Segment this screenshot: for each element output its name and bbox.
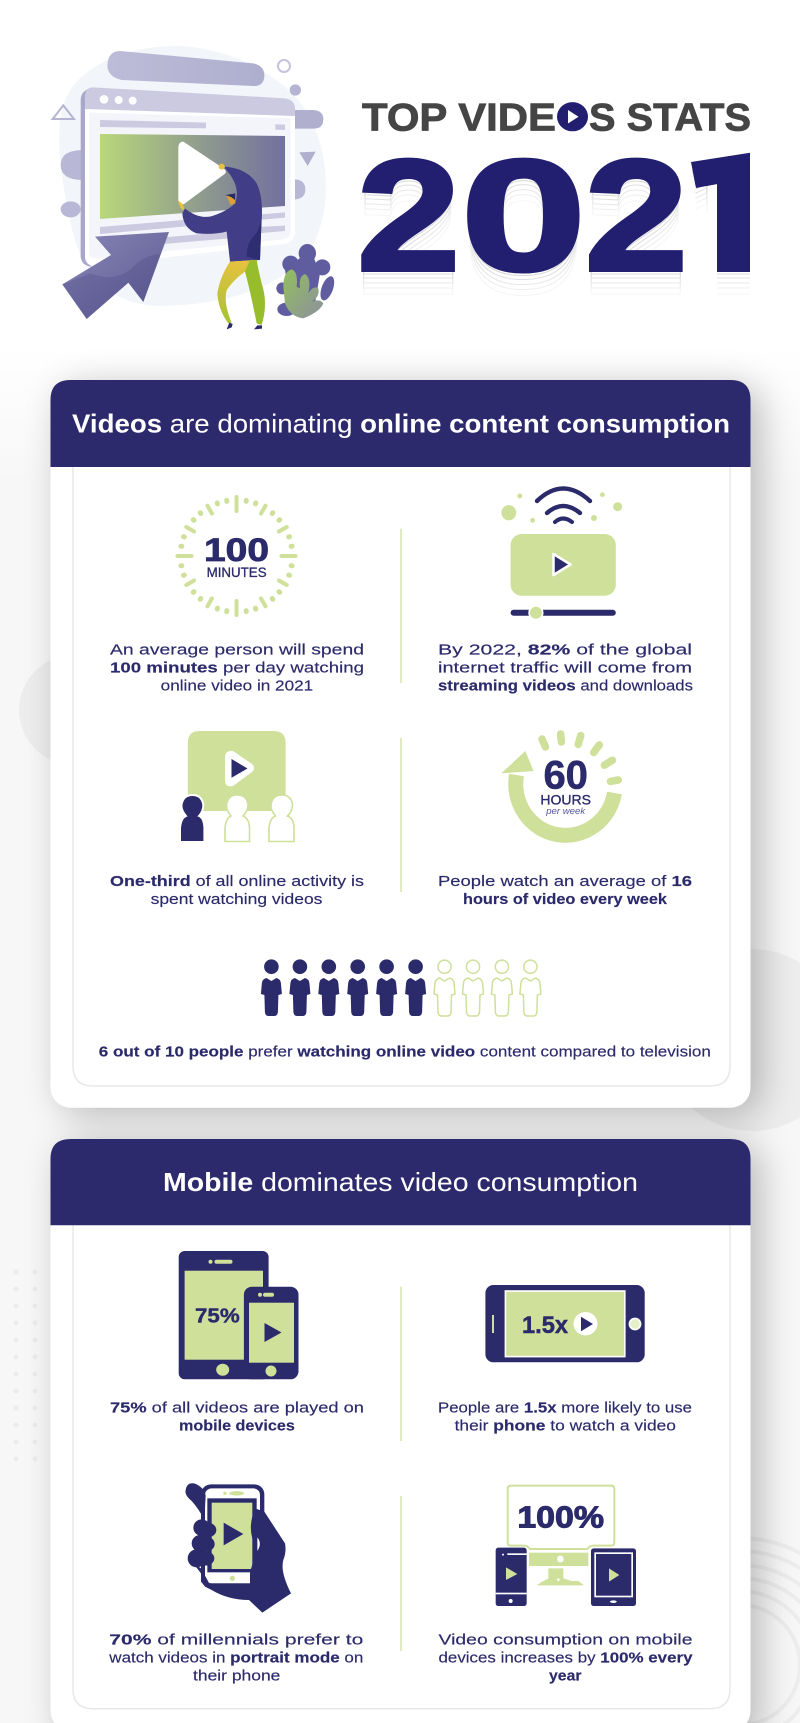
- text: one third: [110, 874, 364, 908]
- text: 82 percent streaming: [438, 642, 693, 694]
- text: 100 minutes: 100 minutes per day watching: [110, 660, 364, 676]
- big year with stacked echo lines: 0: [461, 141, 586, 317]
- icon: streaming video with wifi: [501, 488, 622, 620]
- text: 70 percent millennials: their phone: [193, 1668, 280, 1684]
- text: 1.5x: their phone to watch a video: [455, 1419, 676, 1435]
- text: 100 minutes: [110, 642, 364, 694]
- pictogram: 6 out of 10 people: [261, 959, 541, 1016]
- big year with stacked echo lines: [361, 152, 750, 296]
- big year with stacked echo lines: 0: [461, 136, 586, 312]
- icon: 100 minutes clock: [178, 497, 296, 615]
- big year with stacked echo lines: 0: [461, 152, 586, 328]
- text: 1.5x: [438, 1401, 692, 1435]
- big year with stacked echo lines: 2: [585, 128, 688, 304]
- big year with stacked echo lines: 2: [585, 132, 688, 308]
- icon: 60 hours per week: per week: [545, 806, 586, 817]
- panel: mobile dominates video consumption: [50, 1139, 750, 1723]
- title: top videos stats 2021: [361, 102, 750, 296]
- big year with stacked echo lines: 2: [357, 136, 460, 312]
- icon: 60 hours per week: [501, 734, 618, 835]
- big year with stacked echo lines: 2: [585, 141, 688, 317]
- text: 100 percent every year: year: [549, 1668, 582, 1684]
- big year with stacked echo lines: 2: [357, 146, 460, 322]
- text: 82 percent streaming: By 2022, 82% of the global: [438, 642, 692, 658]
- text: one third: One-third of all online activity is: [110, 874, 364, 890]
- big year with stacked echo lines: 0: [461, 128, 586, 304]
- big year with stacked echo lines: 0: [461, 146, 586, 322]
- big year with stacked echo lines: 2: [357, 141, 460, 317]
- heading: top videos stats: [362, 96, 751, 140]
- text: 6 out of 10 people: 6 out of 10 people prefer watching online video content compared to television: [99, 1045, 711, 1061]
- text: 100 percent every year: Video consumption on mobile: [438, 1632, 692, 1648]
- big year with stacked echo lines: 1: [659, 151, 773, 328]
- text: 82 percent streaming: streaming videos and downloads: [438, 678, 693, 694]
- big year with stacked echo lines: 2: [585, 136, 688, 312]
- icon: tablet and phone 75 percent: 75%: [195, 1305, 240, 1327]
- heading: top videos stats: S STATS: [589, 96, 751, 140]
- icon: tablet and phone 75 percent: [179, 1251, 298, 1379]
- heading: Mobile dominates video consumption: [163, 1167, 638, 1197]
- big year with stacked echo lines: 2: [357, 128, 460, 304]
- icon: multiple devices 100 percent: [496, 1486, 636, 1606]
- big year with stacked echo lines: 1: [659, 127, 773, 304]
- icon: 60 hours per week: HOURS: [540, 791, 591, 807]
- big year with stacked echo lines: 2: [357, 152, 460, 328]
- big year with stacked echo lines: 1: [659, 135, 773, 312]
- big year with stacked echo lines: 1: [659, 145, 773, 322]
- panel: videos dominating online content: [50, 380, 750, 1108]
- text: 16 hours: People watch an average of 16: [438, 874, 692, 890]
- text: 75 percent: mobile devices: [179, 1419, 295, 1435]
- text: 1.5x: People are 1.5x more likely to use: [438, 1401, 692, 1417]
- text: 70 percent millennials: 70% of millennials prefer to: [109, 1632, 363, 1648]
- text: 100 percent every year: devices increases by 100% every: [438, 1650, 694, 1666]
- text: 16 hours: hours of video every week: [463, 892, 668, 908]
- text: 75 percent: [110, 1401, 364, 1435]
- text: 75 percent: 75% of all videos are played on: [110, 1401, 364, 1417]
- icon: landscape phone 1.5x: [485, 1285, 645, 1362]
- illustration: person placing a play button on a browser window: [53, 46, 337, 329]
- text: 70 percent millennials: watch videos in portrait mode on: [108, 1650, 363, 1666]
- icon: audience watching a screen: [180, 731, 294, 842]
- big year with stacked echo lines: 1: [659, 140, 773, 317]
- icon: 100 minutes clock: 100: [204, 532, 269, 568]
- text: 16 hours: [438, 874, 692, 908]
- text: 100 minutes: online video in 2021: [161, 678, 313, 694]
- text: 70 percent millennials: [108, 1632, 363, 1684]
- text: 100 minutes: An average person will spend: [110, 642, 364, 658]
- big year with stacked echo lines: 1: [659, 131, 773, 308]
- heading: Videos are dominating online content consumption: [72, 409, 730, 439]
- panel header: [50, 1139, 750, 1225]
- icon: landscape phone 1.5x: 1.5x: [522, 1312, 569, 1339]
- text: 100 percent every year: [438, 1632, 694, 1684]
- text: 82 percent streaming: internet traffic will come from: [438, 660, 692, 676]
- icon: 60 hours per week: 60: [543, 753, 588, 797]
- big year with stacked echo lines: 2: [357, 132, 460, 308]
- heading: top videos stats: TOP VIDE: [362, 96, 556, 140]
- big year with stacked echo lines: 2: [585, 152, 688, 328]
- icon: play button as the letter O: O: [557, 96, 587, 140]
- icon: 100 minutes clock: MINUTES: [207, 565, 267, 580]
- icon: hand holding phone: [185, 1483, 291, 1613]
- text: one third: spent watching videos: [151, 892, 322, 908]
- icon: multiple devices 100 percent: 100%: [517, 1500, 604, 1535]
- panel header: [50, 380, 750, 467]
- big year with stacked echo lines: 2: [585, 146, 688, 322]
- big year with stacked echo lines: 0: [461, 132, 586, 308]
